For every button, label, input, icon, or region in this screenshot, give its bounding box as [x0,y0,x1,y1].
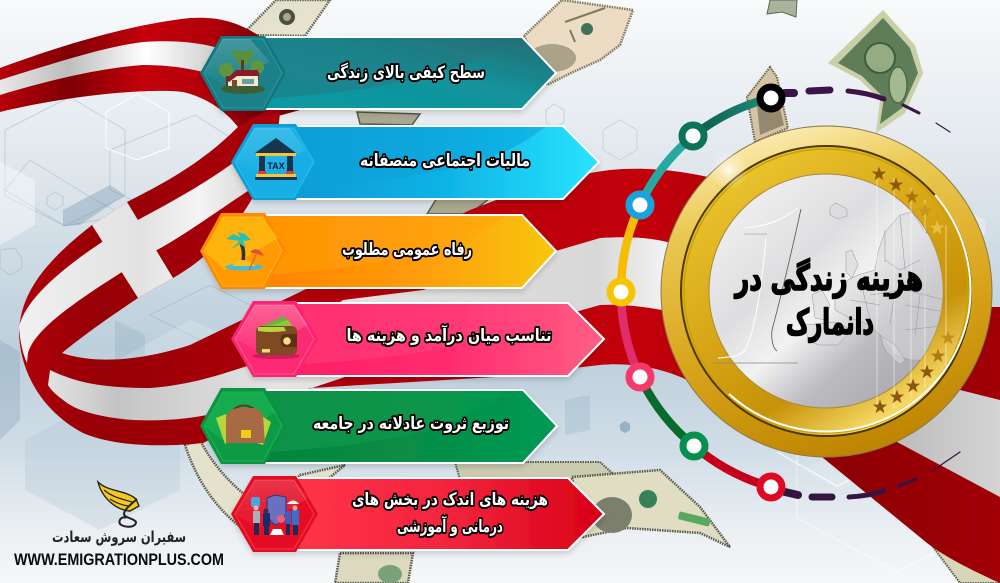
card 3 text: رفاه عمومی مطلوب [342,240,472,260]
card 6 body [296,478,604,550]
card 1: quality of life [200,36,556,111]
logo: company name: سفیران سروش سعادت [52,528,186,546]
title [734,258,923,343]
coin: silver centre [709,174,943,408]
icon: house among trees [219,50,265,94]
card 1 text: سطح کیفی بالای زندگی [327,62,485,83]
bill: strip between cards one and two [357,112,420,125]
card 5 hexagon [200,388,286,464]
icon: briefcase with money [216,406,271,445]
node: black [760,87,782,109]
icon: tax building [255,138,297,180]
node: pink [629,366,651,388]
coin: inner dark ring [681,146,971,436]
card 2 body [296,126,599,199]
path: dashed arc bottom [785,452,960,497]
bill: bottom centre [335,553,413,583]
bill: lower left [185,440,345,540]
card 2 text: مالیات اجتماعی منصفانه [360,151,530,171]
card 4: income and expense balance [231,301,604,377]
coin: sparkle [709,150,749,190]
bill: strip under card five [455,462,620,482]
logo: website address: WWW.EMIGRATIONPLUS.COM [14,551,224,569]
ribbon: white cross bar [92,202,173,298]
coin [661,126,992,457]
coin: outer gold ring [661,126,992,457]
coin: map of Europe [805,203,950,365]
icon: palm island [225,232,264,270]
bill: one dollar [828,10,923,133]
card 2: fair social taxes [231,124,599,200]
node: green [683,435,705,457]
title: دانمارک [786,303,874,343]
timeline nodes [610,87,782,498]
bill: hundred dollars [572,470,730,547]
bill: small top [767,0,797,17]
path: dashed arc top [785,90,950,132]
ribbon: middle white stripe [19,150,265,363]
ribbon: lower and right white stripe [48,237,1000,497]
path: coloured timeline arc [621,98,771,487]
node: yellow [610,281,632,303]
node: red [760,476,782,498]
node: dark green [682,125,704,147]
ribbon: top red band [0,18,300,127]
ribbon: top white stripe [0,41,225,95]
card 6 text: درمانی و آموزشی [397,515,503,537]
card 6 hexagon [231,476,318,552]
card 3 body [265,215,556,288]
card 5 text: توزیع ثروت عادلانه در جامعه [313,414,509,434]
title: هزینه زندگی در [734,258,923,299]
card 4 body [296,303,604,376]
coin: vertical shine lines [877,170,946,412]
card 2 hexagon [231,124,318,200]
card 3 hexagon [200,213,286,289]
bill: top centre-left [242,0,330,36]
card 1 hexagon [200,36,286,111]
card 3: public welfare [200,213,556,289]
card 1 body [265,37,556,109]
card 6: low health and education costs [231,476,604,552]
coin: numeral one [713,208,801,363]
coin: stars lower arc [873,330,955,413]
icon: wallet [252,316,300,359]
card 4 hexagon [231,301,318,377]
icon: tax building: TAX [267,161,285,171]
card 6 text: هزینه های اندک در بخش های [352,490,548,510]
coin: stars upper arc [872,166,944,234]
card 6 text [352,490,548,537]
node: blue [629,194,651,216]
card 5 body [265,390,557,463]
logo [14,482,224,569]
logo: winged emblem [98,482,139,527]
card 5: fair wealth distribution [200,388,557,464]
bill: bottom right [933,547,1000,583]
bill: top twenty dollars [524,0,633,85]
card 4 text: تناسب میان درآمد و هزینه ها [346,324,552,346]
icon: people with shield [251,495,299,535]
bill: strip between cards two and three [427,198,490,214]
bill: behind first node [747,67,788,142]
